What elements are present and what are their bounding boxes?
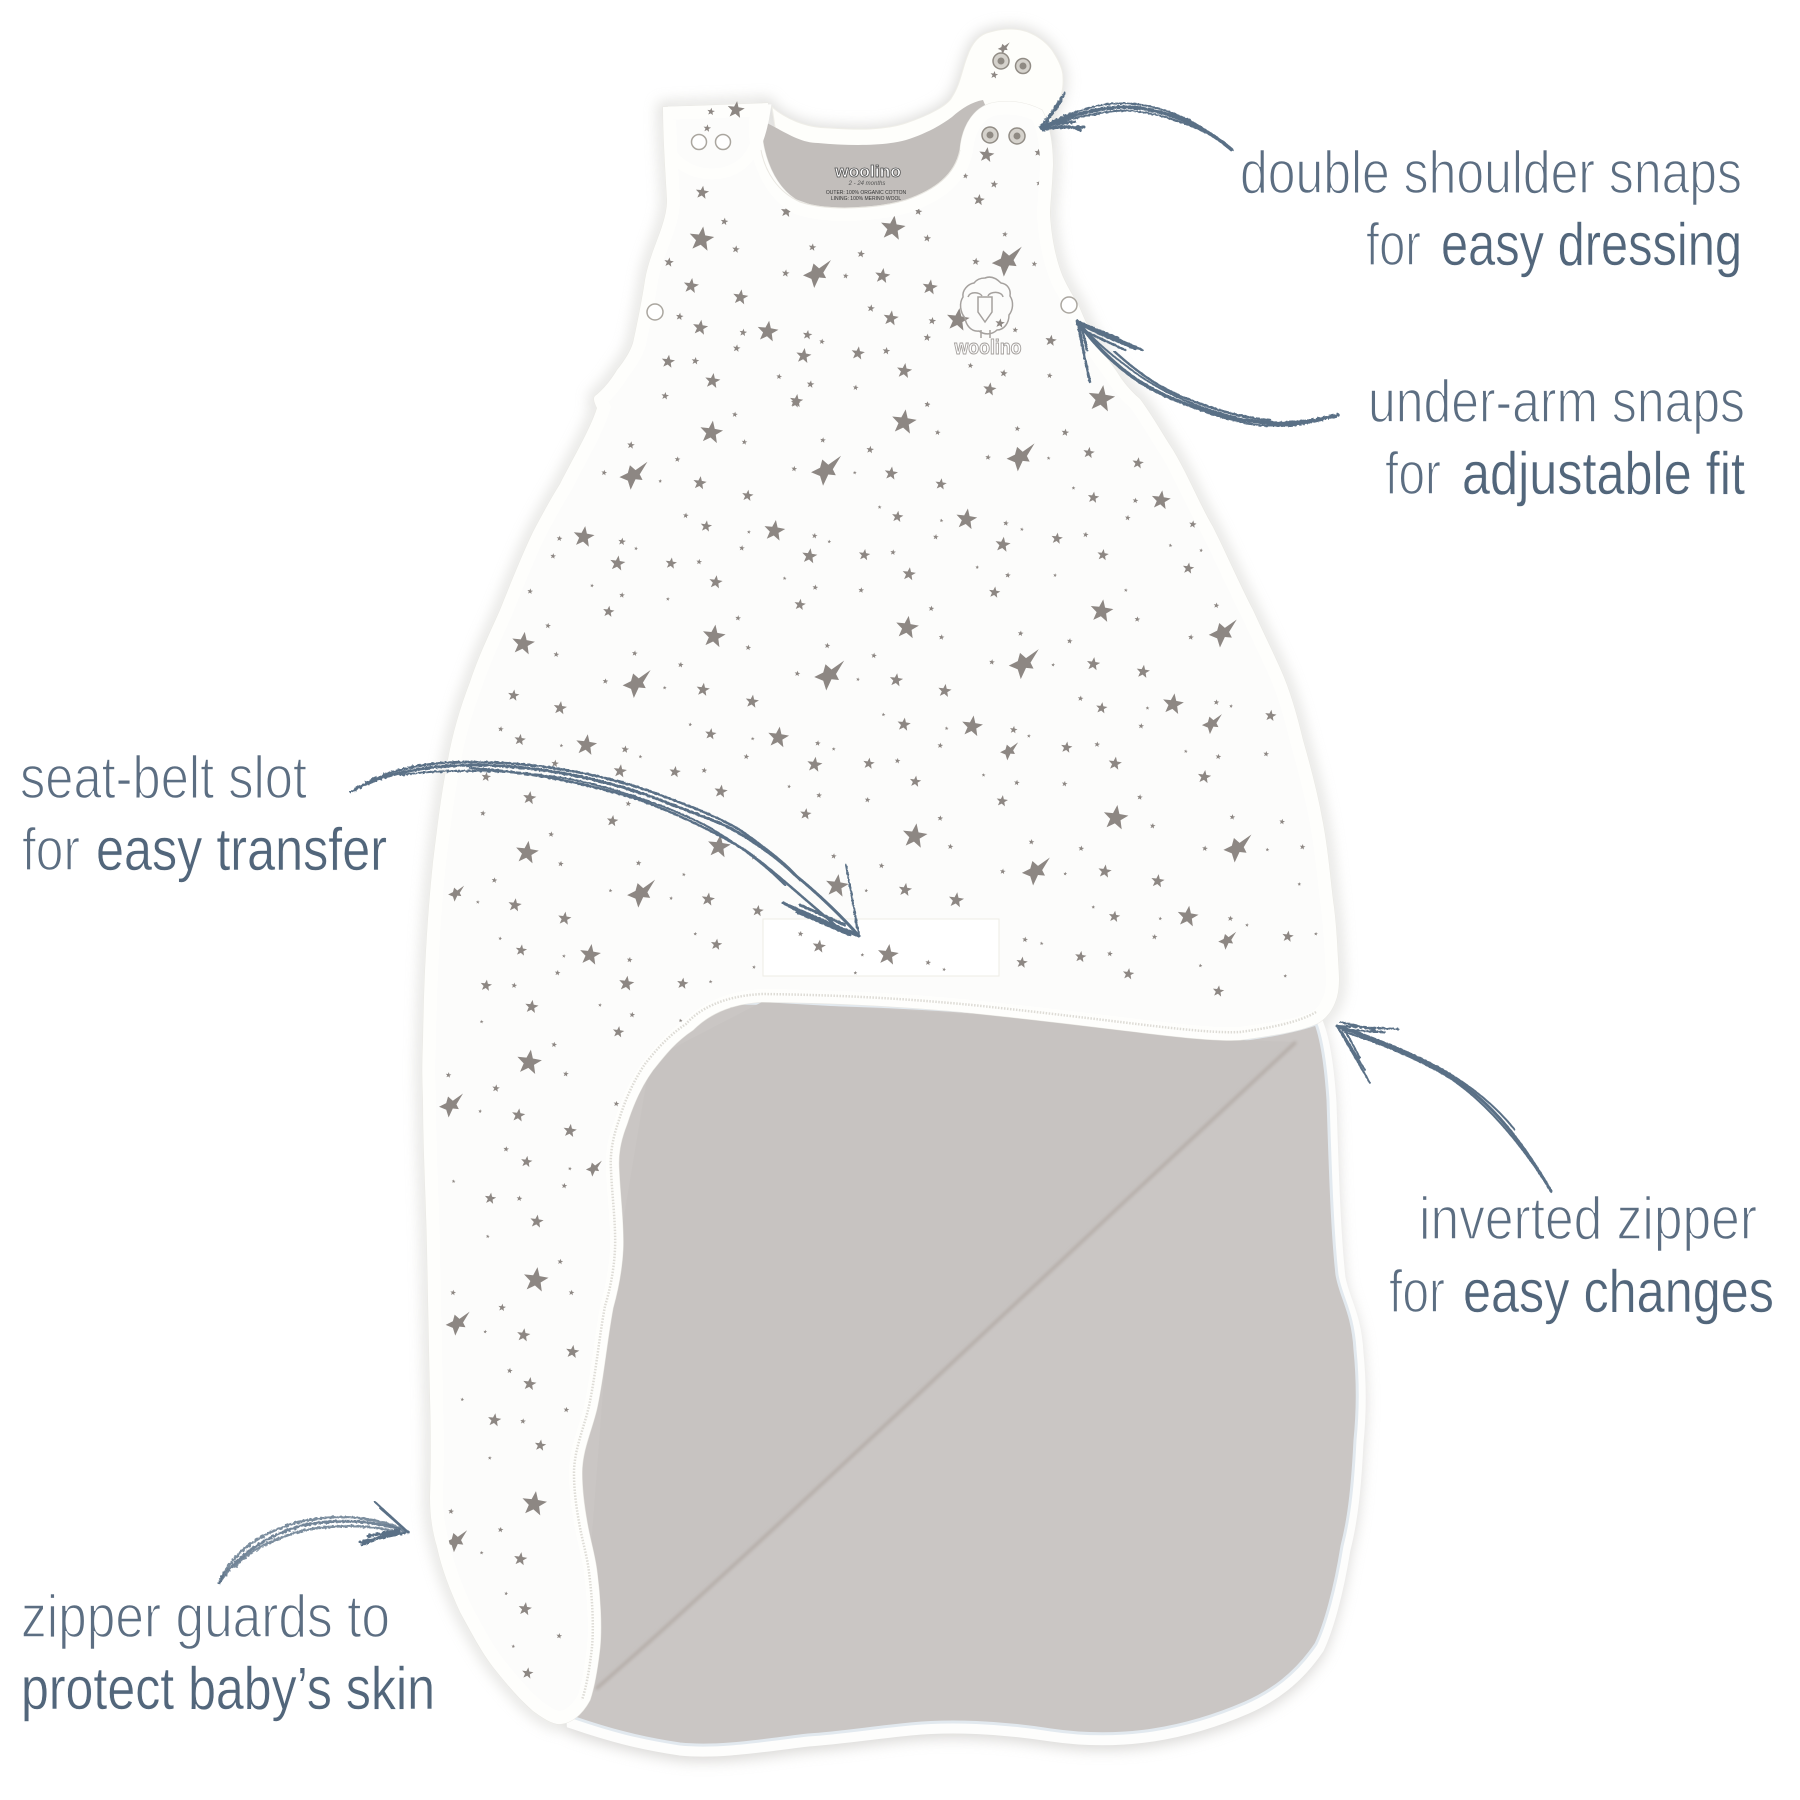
sheep logo xyxy=(954,277,1022,359)
neck binding seam xyxy=(761,150,960,208)
seat-belt slot patch xyxy=(763,919,999,976)
sheep logo: woolino xyxy=(954,337,1022,359)
arrow: seat-belt slot xyxy=(351,762,859,936)
neck label: 2 - 24 months xyxy=(848,181,885,187)
callout: seat-belt slot: seat-belt slot xyxy=(20,744,307,811)
arrow: shoulder snaps xyxy=(1041,93,1232,150)
callout: double shoulder snaps: for xyxy=(1366,211,1421,278)
star pattern middle xyxy=(448,398,1318,997)
upper folded flap lining xyxy=(590,1002,1296,1689)
neck label xyxy=(826,162,906,202)
callout: seat-belt slot: easy transfer xyxy=(96,816,387,883)
soft drop shadow xyxy=(422,29,1357,1753)
callout: zipper guards xyxy=(21,1583,435,1722)
binding band around front panel xyxy=(422,101,1339,1724)
arrow: under-arm snaps xyxy=(1077,321,1338,426)
back shoulder strap xyxy=(772,29,1063,160)
arrow: inverted zipper xyxy=(1337,1022,1551,1191)
left tab stars xyxy=(704,101,745,132)
callout: double shoulder snaps xyxy=(1240,139,1742,278)
callout: inverted zipper: for xyxy=(1389,1258,1445,1325)
neck label: woolino xyxy=(834,162,901,181)
star pattern lower xyxy=(439,996,736,1679)
callout: inverted zipper xyxy=(1389,1185,1774,1325)
callout: under-arm snaps: adjustable fit xyxy=(1462,440,1745,507)
callout: seat-belt slot xyxy=(20,744,387,883)
star pattern upper xyxy=(661,147,1115,411)
arrow: zipper guards xyxy=(219,1502,408,1583)
callout: zipper guards: protect baby’s skin xyxy=(21,1655,435,1722)
neck label: OUTER: 100% ORGANIC COTTON xyxy=(826,190,906,196)
neck label: LINING: 100% MERINO WOOL xyxy=(831,196,901,202)
zipper stitching along flap edge xyxy=(574,994,1316,1700)
sleeping bag garment xyxy=(422,29,1357,1753)
callout: seat-belt slot: for xyxy=(22,816,80,883)
back panel grey lining with white piping xyxy=(560,1002,1357,1748)
fold shadow line xyxy=(596,1042,1296,1689)
left shoulder tab xyxy=(668,110,765,174)
front panel xyxy=(422,101,1339,1724)
back strap stars xyxy=(991,42,1010,79)
callout: under-arm snaps: for xyxy=(1385,440,1441,507)
callout: under-arm snaps xyxy=(1368,368,1745,507)
snaps xyxy=(647,53,1077,320)
inner neck grey lining xyxy=(755,100,1000,215)
callout: zipper guards: zipper guards to xyxy=(21,1583,390,1650)
